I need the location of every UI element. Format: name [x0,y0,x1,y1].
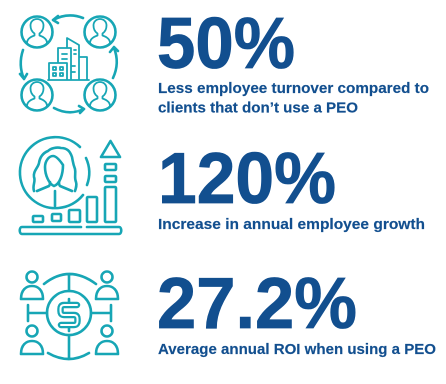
icon: dollar network [21,272,118,359]
stat: 27.2%: 27.2% [157,264,357,344]
caption: turnover: clients that don’t use a PEO [158,100,358,116]
caption: turnover: Less employee turnover compared to [158,81,429,97]
caption: growth: Increase in annual employee growth [158,217,425,233]
stat: 120%: 120% [158,139,336,219]
icon: employee growth chart [20,137,121,234]
caption: turnover [158,81,429,116]
stat: 50%: 50% [157,4,295,84]
caption: ROI: Average annual ROI when using a PEO [158,342,436,358]
icon: people around building [20,15,118,113]
